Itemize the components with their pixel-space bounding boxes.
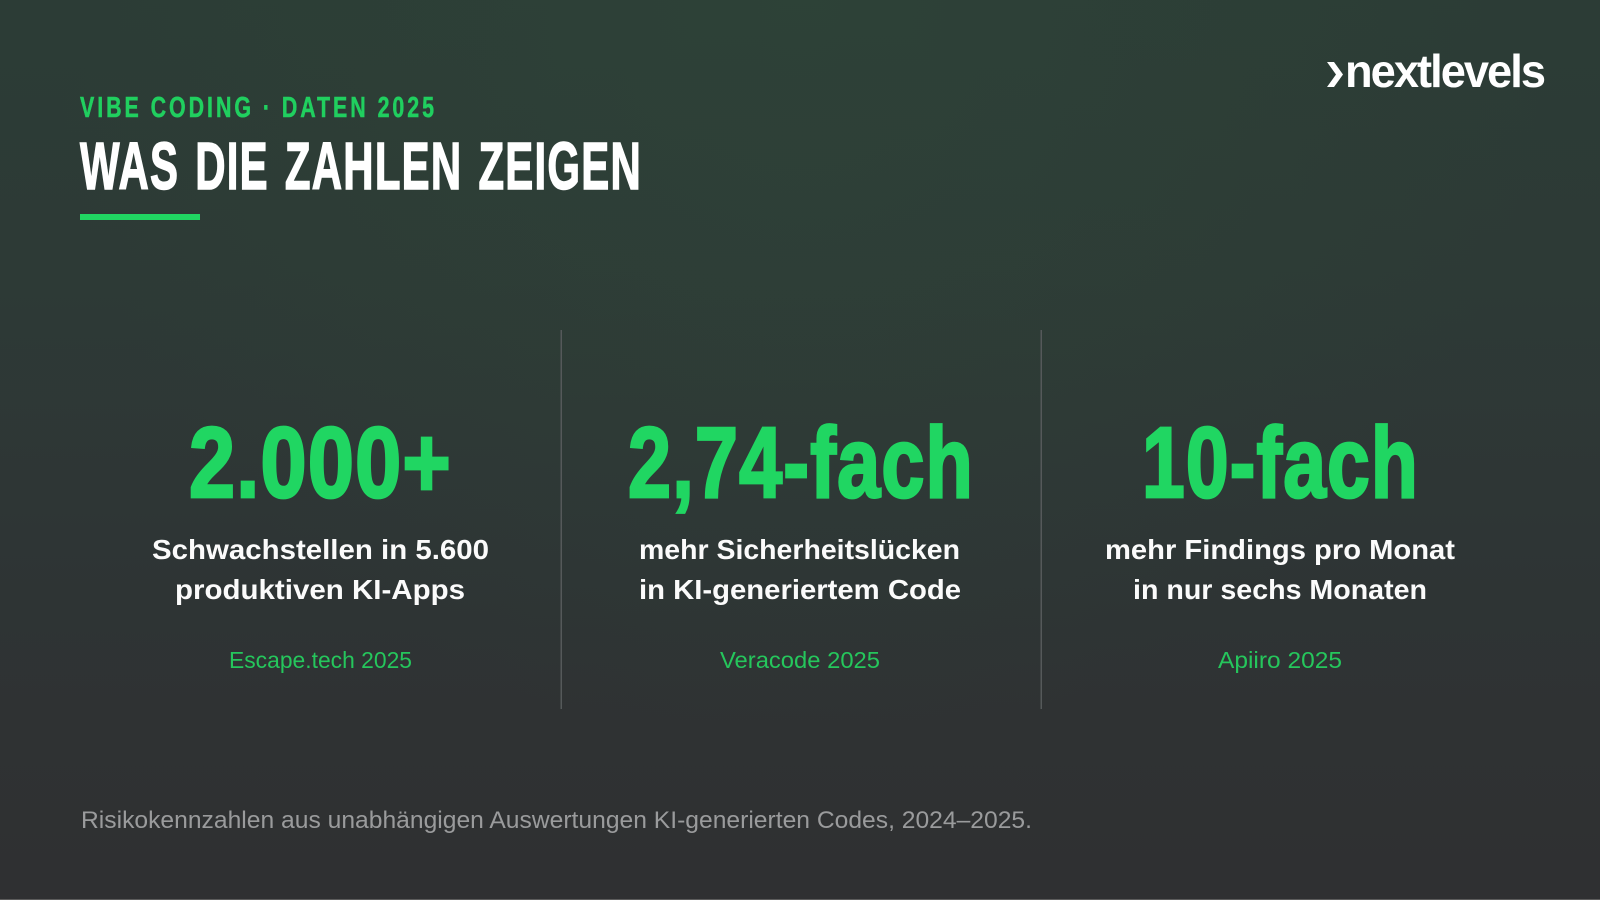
stat number: 10-fach [1142, 407, 1419, 519]
stat description: in KI-generiertem Code [639, 574, 961, 605]
stat description: mehr Sicherheitslücken [639, 534, 960, 565]
stat description: Schwachstellen in 5.600 [152, 534, 489, 565]
accent rule [80, 214, 200, 220]
header [80, 92, 642, 220]
stat description: produktiven KI-Apps [175, 574, 465, 605]
stat description: in nur sechs Monaten [1133, 574, 1427, 605]
stat description: mehr Findings pro Monat [1105, 534, 1455, 565]
panel: stat Apiiro [1105, 407, 1455, 673]
title: WAS DIE ZAHLEN ZEIGEN [80, 129, 642, 204]
panel: stat Veracode [628, 407, 974, 673]
stat description [1105, 534, 1455, 605]
source: Apiiro 2025 [1218, 647, 1342, 673]
panel: stat Escape.tech [152, 407, 489, 673]
stat number: 2,74-fach [628, 407, 974, 519]
source: Escape.tech 2025 [229, 647, 412, 673]
stat number: 2.000+ [189, 407, 452, 519]
source: Veracode 2025 [720, 647, 880, 673]
logo: nextlevels [1327, 45, 1544, 97]
footnote: Risikokennzahlen aus unabhängigen Auswertungen KI-generierten Codes, 2024–2025. [81, 807, 1032, 834]
stat description [152, 534, 489, 605]
stat description [639, 534, 961, 605]
eyebrow: VIBE CODING · DATEN 2025 [80, 92, 437, 124]
icon: logo chevron [1327, 62, 1343, 87]
logo wordmark: nextlevels [1345, 45, 1544, 97]
